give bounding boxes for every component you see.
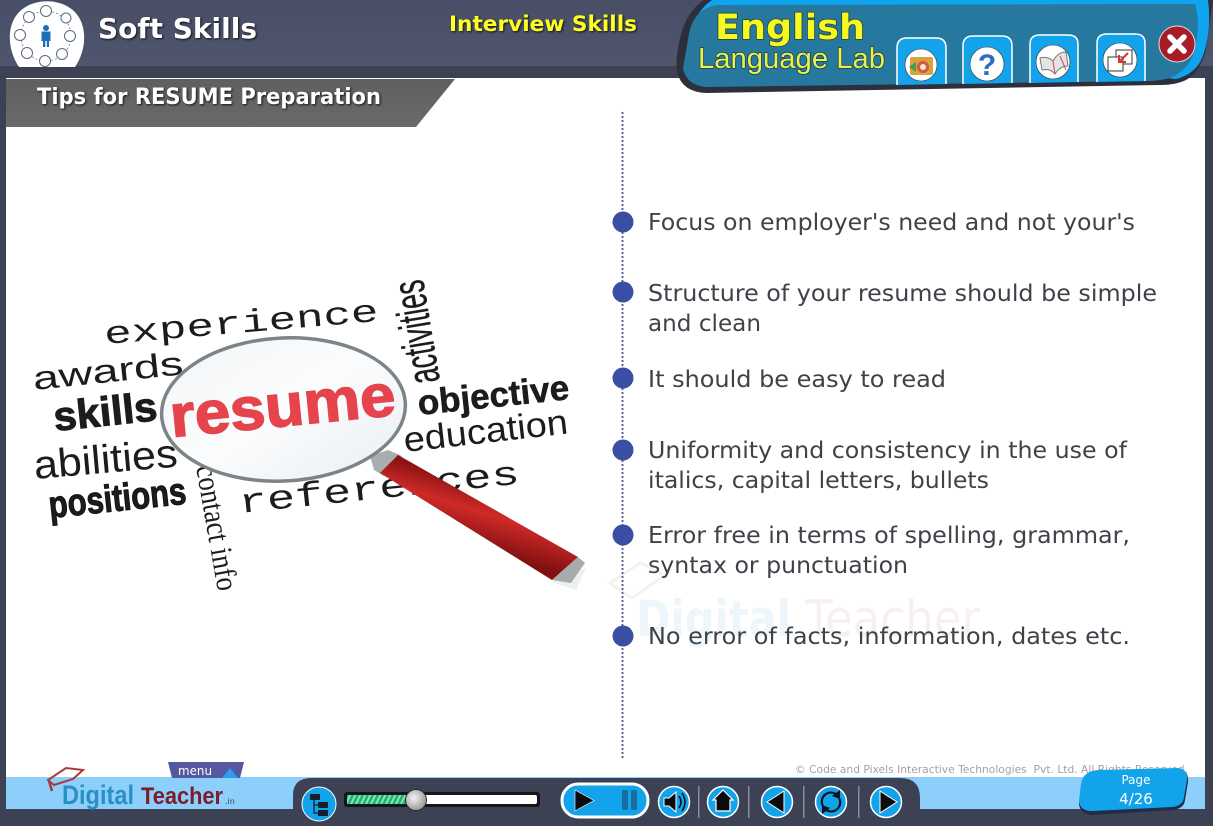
word: abilities: abilities [32,432,179,488]
page counter: 4/26 [1119,790,1153,808]
word: resume: resume [167,361,398,450]
page counter [1079,768,1188,815]
digital teacher logo [48,768,235,810]
tab: help [963,36,1012,84]
outline button [302,787,336,821]
section heading banner [6,79,455,127]
tip 5: Error free in terms of spelling, grammar, [648,523,1130,549]
watermark [610,563,980,648]
digital teacher logo: .in [225,797,235,806]
tab: resize [1097,34,1145,82]
replay button [816,786,846,818]
tip 4: italics, capital letters, bullets [648,468,989,494]
english language lab toolbar [676,0,1213,93]
english title: English [715,8,865,48]
tips list [612,210,1157,650]
word: objective: objective [416,368,571,423]
copyright notice: © Code and Pixels Interactive Technologies Pvt. Ltd. All Rights Reserved. [795,764,1188,776]
tab: help: ? [978,49,996,82]
section heading: Tips for RESUME Preparation [37,85,381,110]
dotted timeline [621,113,624,759]
watermark: Digital [636,590,791,648]
header background [0,0,1213,68]
separator [748,786,750,818]
word: positions: positions [47,471,188,527]
word: education: education [401,403,570,460]
word: experience: experience [103,294,380,354]
tab: book [1030,35,1078,83]
word: awards: awards [31,344,185,397]
previous button [762,786,792,818]
tip 4 [612,438,1128,494]
bottom bar [0,777,1213,826]
tip 1: Focus on employer's need and not your's [648,210,1135,236]
play pause button [562,784,648,817]
page counter: Page [1121,773,1151,787]
menu tab [168,762,244,778]
language lab subtitle: Language Lab [698,43,885,75]
digital teacher logo: Digital [62,780,134,810]
tab: timer [897,38,946,85]
next button [870,786,902,818]
word: contact info: contact info [189,462,246,593]
title: Soft Skills: Soft Skills [98,12,257,45]
tip 2 [612,281,1157,337]
separator [698,786,700,818]
home button [708,786,738,818]
tip 5: syntax or punctuation [648,553,908,579]
resume magnifying glass image [31,277,586,593]
soft skills logo [10,1,84,67]
tip 6: No error of facts, information, dates etc. [648,624,1130,650]
word: activities: activities [382,277,450,388]
word: skills: skills [51,383,159,440]
word: references: references [237,457,522,524]
tip 2: and clean [648,311,761,337]
tip 2: Structure of your resume should be simple [648,281,1157,307]
separator [858,786,860,818]
tip 4: Uniformity and consistency in the use of [648,438,1128,464]
menu tab: menu [178,763,212,778]
volume button [658,786,690,818]
progress slider [344,790,540,810]
watermark: Teacher [804,590,980,648]
close button [1159,26,1195,62]
digital teacher logo: Teacher [141,783,223,810]
tip 3: It should be easy to read [648,367,946,393]
tip 5 [612,523,1130,579]
separator [803,786,804,818]
magnifier lens [158,332,409,487]
magnifier handle [370,450,586,590]
subject: Interview Skills: Interview Skills [449,12,637,36]
player control bar [293,778,920,826]
